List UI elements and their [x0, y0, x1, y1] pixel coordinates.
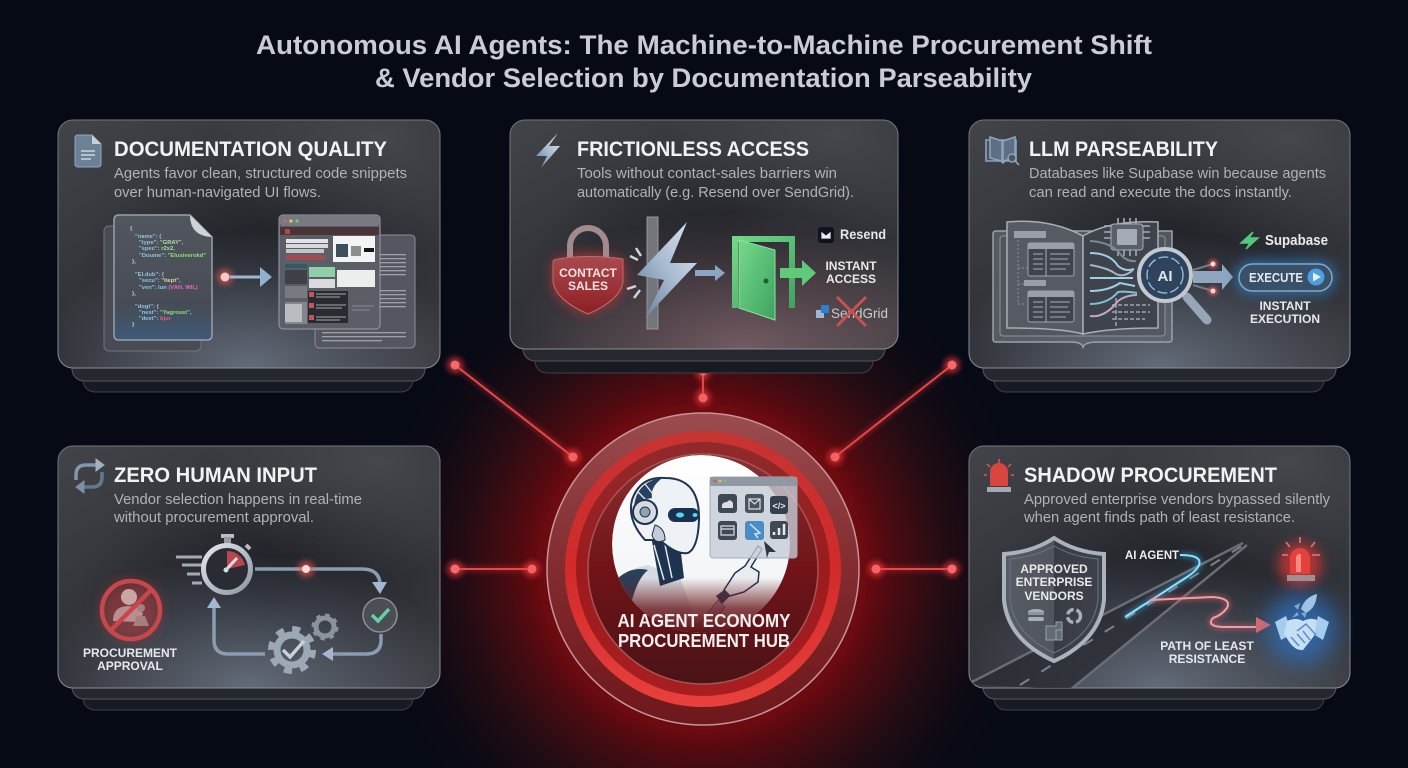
icon: book with magnifier [986, 137, 1019, 165]
heading: DOCUMENTATION QUALITY [114, 138, 387, 161]
execute button: EXECUTE [1249, 271, 1303, 285]
code document illustration: "type": "GRAY", [139, 240, 184, 246]
heading: ZERO HUMAN INPUT [114, 464, 317, 487]
barrier and lightning bolt [637, 217, 697, 329]
label: path of least resistance: PATH OF LEAST [1160, 639, 1254, 653]
icon: document [75, 135, 101, 167]
description [113, 492, 362, 526]
code document illustration: "spec": r2x2, [139, 246, 175, 252]
lock: contact sales: CONTACT [559, 266, 618, 280]
hub label: AI AGENT ECONOMY [618, 611, 790, 631]
label: instant execution: EXECUTION [1250, 312, 1320, 326]
arrow to door [695, 265, 725, 281]
description: when agent finds path of least resistance. [1023, 510, 1295, 526]
hub label [618, 611, 790, 651]
description: Agents favor clean, structured code snippets [114, 166, 407, 182]
data flow arrows [1090, 241, 1137, 316]
description [577, 166, 854, 201]
rocket and handshake [1266, 592, 1338, 664]
code document illustration: "dogt": { [135, 304, 160, 310]
panel: shadow procurement [968, 446, 1350, 710]
code document illustration: "Doume": "Elusiverokd" [139, 253, 206, 259]
green door with arrow [732, 236, 816, 320]
check circle [363, 598, 397, 632]
logo: Resend: Resend [840, 226, 886, 242]
shield: approved enterprise vendors: APPROVED [1020, 562, 1088, 576]
label: AI agent: AI AGENT [1125, 548, 1180, 562]
title: & Vendor Selection by Documentation Parseability [375, 63, 1032, 93]
shield: approved enterprise vendors [1004, 538, 1104, 661]
heading: SHADOW PROCUREMENT [1024, 464, 1277, 487]
label: instant execution: INSTANT [1259, 299, 1311, 313]
description [1029, 166, 1326, 201]
description: Approved enterprise vendors bypassed silently [1024, 492, 1331, 508]
code document illustration: "name": { [135, 234, 162, 240]
icon: cycle arrows [76, 459, 104, 493]
description: without procurement approval. [113, 510, 314, 526]
label: instant access [825, 259, 877, 286]
lock: contact sales: SALES [568, 279, 608, 293]
description: Tools without contact-sales barriers win [577, 166, 837, 182]
path of least resistance: red [1150, 597, 1271, 633]
heading: FRICTIONLESS ACCESS [577, 138, 809, 161]
label: procurement approval [83, 646, 178, 673]
hub label: PROCUREMENT HUB [618, 631, 790, 651]
execute button [1235, 260, 1336, 295]
description: over human-navigated UI flows. [114, 185, 321, 201]
label: path of least resistance [1160, 639, 1254, 666]
chip icon [1104, 218, 1150, 256]
stopwatch [176, 534, 250, 592]
code document illustration: "secu": "tiept", [139, 278, 181, 284]
label: instant execution [1250, 299, 1320, 326]
panel: zero human input [58, 446, 440, 710]
gears [271, 615, 337, 671]
floating UI panel: </> [772, 501, 786, 511]
description: Databases like Supabase win because agents [1029, 166, 1326, 182]
road [968, 543, 1247, 690]
open book illustration [993, 221, 1172, 347]
logo: Supabase [1241, 232, 1328, 249]
logo: SendGrid crossed out [816, 297, 888, 326]
code document illustration: "ven": lun (VAN. WIL) [139, 285, 198, 291]
code document illustration: { [130, 226, 133, 232]
title [256, 30, 1152, 93]
label: instant access: INSTANT [825, 259, 877, 273]
code document illustration: }, [132, 291, 136, 297]
code document illustration: "El.dub": { [135, 272, 165, 278]
floating UI panel [710, 477, 797, 558]
panel: documentation quality [58, 120, 440, 392]
label: procurement approval: PROCUREMENT [83, 646, 178, 660]
code document illustration: "deet": bjur [139, 316, 172, 322]
AI magnifier: AI [1158, 268, 1172, 285]
alarm light [1278, 537, 1322, 587]
AI magnifier [1139, 249, 1207, 320]
arrow and signal dots [1193, 259, 1233, 296]
description: can read and execute the docs instantly. [1029, 185, 1292, 201]
icon: alarm [984, 459, 1014, 492]
label: path of least resistance: RESISTANCE [1169, 652, 1245, 666]
prohibited approval icon [101, 580, 161, 640]
shield: approved enterprise vendors: ENTERPRISE [1016, 575, 1092, 589]
code document illustration: }, [132, 259, 136, 265]
label: procurement approval: APPROVAL [97, 659, 163, 673]
browser UI illustration [279, 215, 415, 348]
lock: contact sales [552, 228, 641, 314]
arrow: code to UI [217, 267, 272, 287]
code document illustration: } [132, 322, 135, 328]
agent path: blue [1125, 555, 1200, 617]
description: automatically (e.g. Resend over SendGrid). [577, 185, 854, 201]
heading: LLM PARSEABILITY [1029, 138, 1218, 161]
panel: frictionless access [510, 120, 898, 373]
logo: Resend [818, 226, 886, 243]
central hub [538, 404, 868, 734]
robot illustration [610, 455, 797, 640]
description [114, 166, 407, 201]
logo: Supabase: Supabase [1265, 232, 1328, 249]
title: Autonomous AI Agents: The Machine-to-Machine Procurement Shift [256, 30, 1152, 60]
connectors from hub to panels [447, 357, 960, 577]
code document illustration [104, 215, 212, 351]
icon: lightning [536, 133, 560, 168]
panel: LLM parseability [969, 120, 1350, 392]
process loop arrows [207, 561, 387, 661]
description [1023, 492, 1331, 526]
label: instant access: ACCESS [826, 272, 876, 286]
description: Vendor selection happens in real-time [114, 492, 362, 508]
shield: approved enterprise vendors: VENDORS [1024, 589, 1084, 603]
code document illustration: "nest": "Yagrosst", [139, 310, 192, 316]
logo: SendGrid crossed out: SendGrid [831, 305, 888, 321]
